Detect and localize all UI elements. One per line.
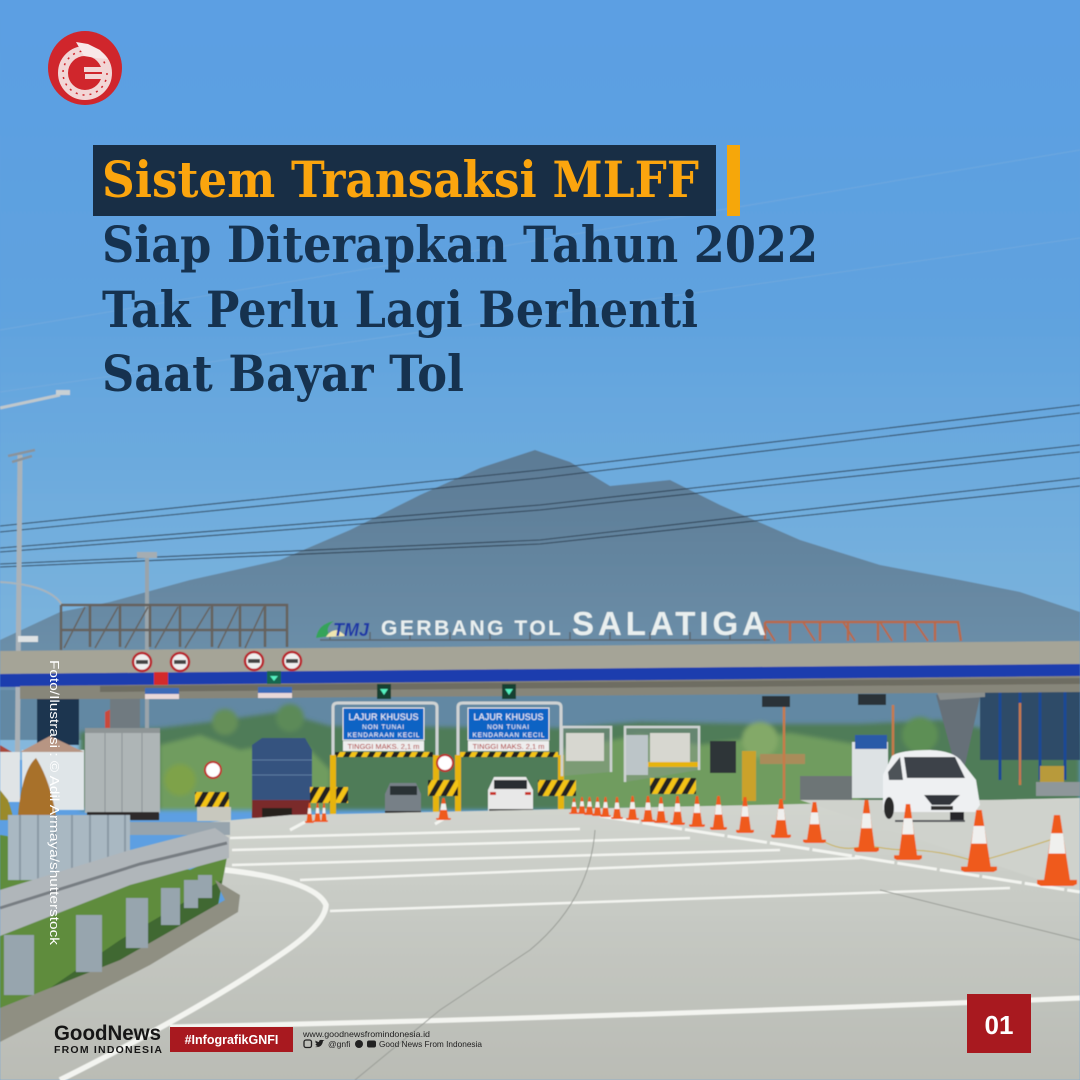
hazy foothills: [0, 690, 1080, 740]
road surface: [0, 798, 1080, 1080]
TMJ logo: TMJ: [333, 620, 370, 640]
title line 2: Siap Diterapkan Tahun 2022: [102, 215, 818, 274]
gate name sign: GERBANG TOL: [381, 617, 561, 640]
sign rail: [320, 632, 770, 640]
shrubs: [18, 758, 56, 816]
distant toll booths: [562, 703, 1080, 801]
pillars left: [37, 690, 79, 745]
traffic cones: [305, 796, 1077, 886]
gate name sign: SALATIGA: [572, 605, 766, 642]
tree line: [80, 704, 1080, 810]
title line 3: Tak Perlu Lagi Berhenti: [102, 280, 698, 339]
gantry signs: [133, 652, 886, 707]
logo: GNFI red round emblem: [48, 31, 122, 105]
street lamp left: [0, 390, 157, 800]
icon: twitter: [315, 1040, 324, 1047]
billboard frame left: [61, 605, 287, 650]
toll gate 1: NON TUNAI: [362, 724, 405, 731]
faint upper wires: [0, 150, 1080, 392]
page number: 01: [985, 1010, 1013, 1040]
road markings: [60, 816, 1080, 1080]
icon: youtube: [367, 1040, 376, 1048]
toll gate 2: TINGGI MAKS. 2,1 m: [472, 742, 544, 751]
toll gate 1: [330, 703, 439, 815]
grey car: [385, 783, 421, 817]
hashtag label: #InfografikGNFI: [185, 1033, 278, 1047]
photo credit: Foto/Ilustrasi : © Adil Armaya/shutterstock: [47, 660, 61, 946]
guard rail: [0, 828, 229, 995]
hashtag label: [170, 1027, 293, 1052]
road cracks: [355, 830, 1080, 1080]
toll gate 1: TINGGI MAKS. 2,1 m: [348, 742, 420, 751]
toll gate 2: NON TUNAI: [487, 724, 530, 731]
gantry bridge: [0, 641, 1080, 699]
page number: [967, 994, 1031, 1053]
verge shadow: [40, 880, 222, 995]
toll gate 1: KENDARAAN KECIL: [348, 732, 420, 739]
toll gate 2: [428, 703, 576, 813]
title: [93, 145, 818, 403]
white box truck: [85, 728, 160, 820]
toll gate 2: KENDARAAN KECIL: [472, 732, 545, 739]
icon: facebook: [355, 1040, 363, 1048]
hazard barriers left: [195, 762, 348, 821]
icon: instagram: [304, 1040, 312, 1048]
footer contact text: www.goodnewsfromindonesia.id: [302, 1029, 430, 1039]
footer brand: GoodNews: GoodNews: [54, 1022, 161, 1045]
title highlight box: [93, 145, 716, 216]
toll gate 2: LAJUR KHUSUS: [474, 712, 544, 722]
sky: [0, 0, 1080, 760]
toll gate 1: LAJUR KHUSUS: [348, 712, 418, 722]
title line 1: Sistem Transaksi MLFF: [102, 150, 699, 209]
grass verge: [0, 835, 228, 1010]
title line 4: Saat Bayar Tol: [102, 344, 464, 403]
footer channel name: Good News From Indonesia: [379, 1039, 482, 1049]
footer brand: GoodNews: FROM INDONESIA: [54, 1044, 162, 1056]
footer brand: GoodNews: [54, 1022, 162, 1056]
footer contact text: [302, 1029, 482, 1049]
picket fence: [8, 815, 230, 880]
cone chain: [814, 835, 1056, 862]
blue tarp truck: [252, 738, 312, 818]
white car centre: [488, 777, 533, 814]
kerb: [0, 880, 240, 1042]
title accent bar: [727, 145, 740, 216]
billboard frame right: [765, 622, 961, 641]
gate name sign: [381, 605, 766, 642]
mountain: [0, 450, 1080, 740]
TMJ logo: [316, 620, 370, 640]
pillars and columns right: [980, 690, 1080, 760]
house: [0, 736, 84, 810]
footer handle: @gnfi: [328, 1039, 350, 1049]
power lines: [0, 405, 1080, 567]
red flag: [105, 708, 113, 728]
white MPV: [883, 750, 980, 822]
